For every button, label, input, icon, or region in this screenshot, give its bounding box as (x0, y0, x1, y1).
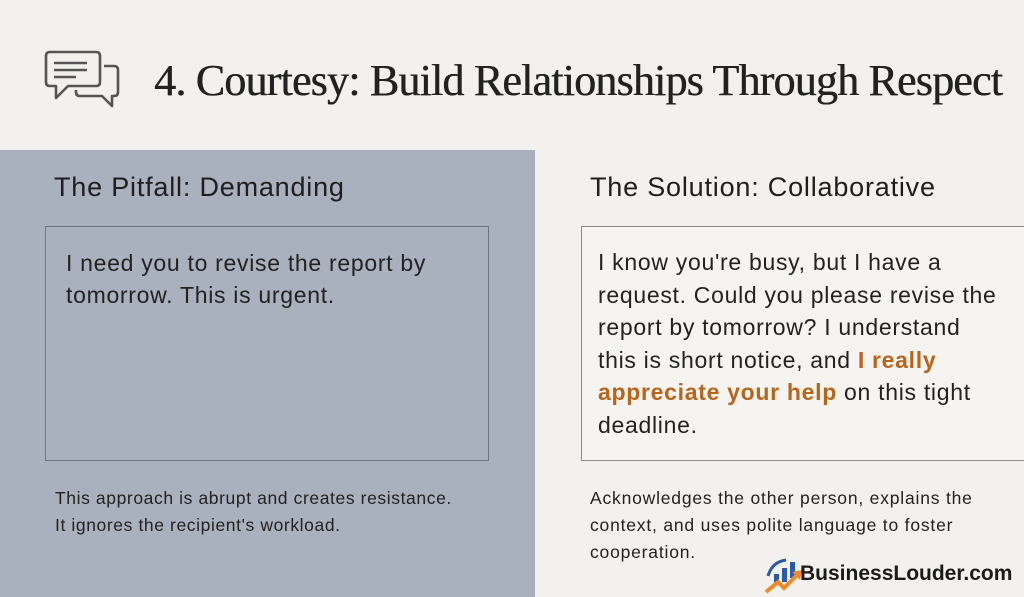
logo: BusinessLouder (764, 558, 1012, 594)
caption: pitfall: This approach is abrupt and creates resistance. It ignores the recipient's workload. (55, 488, 452, 535)
panel: solution (581, 172, 1024, 562)
text box: demanding message (45, 226, 489, 461)
text box: demanding message: I need you to revise the report by tomorrow. This is urgent. (66, 250, 426, 308)
caption: solution: Acknowledges the other person, explains the context, and uses polite language to foster cooperation. (590, 488, 973, 562)
text box: collaborative message: I know you're busy, but I have a request. Could you please revise the report by tomorrow? I understand this is short notice, and I really appreciate your help on this tight deadline. (598, 249, 997, 438)
heading: pitfall: The Pitfall: Demanding (54, 172, 345, 202)
heading: solution: The Solution: Collaborative (590, 172, 936, 202)
logo: BusinessLouder: BusinessLouder.com (800, 562, 1012, 585)
panel: pitfall (0, 150, 535, 597)
icon: chat bubbles (44, 50, 120, 108)
icon: logo chart (764, 558, 802, 594)
title: 4. Courtesy: Build Relationships Through Respect (154, 56, 1002, 105)
